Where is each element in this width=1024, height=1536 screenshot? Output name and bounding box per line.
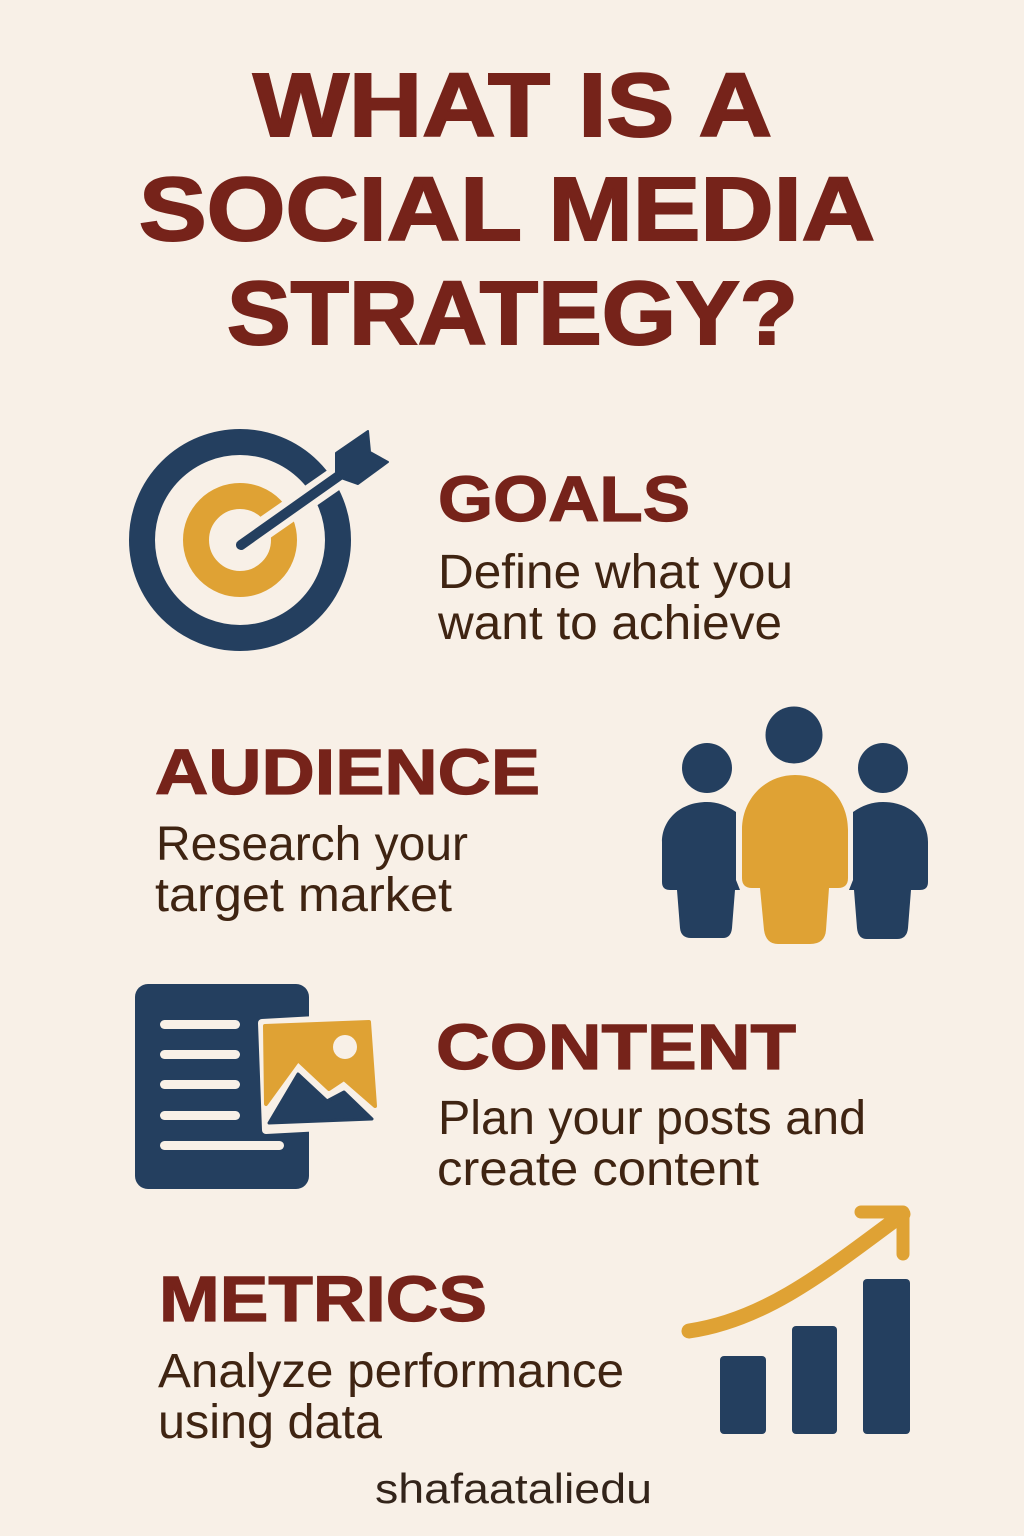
footer credit: shafaataliedu [375,1465,652,1512]
block: audience [155,736,540,922]
block: metrics [158,1263,624,1449]
block: goals [437,463,793,650]
icon: document with image [135,984,378,1189]
icon: target with arrow [142,431,388,638]
block: metrics: Analyze performance [158,1345,624,1398]
icon: growth chart [689,1212,910,1434]
title: SOCIAL MEDIA [139,160,875,260]
block: content: create content [437,1143,759,1196]
block: audience: AUDIENCE [155,736,540,808]
title [139,56,875,364]
block: goals: Define what you [438,546,793,599]
block: content [436,1011,866,1196]
block: metrics: using data [158,1396,382,1449]
block: audience: target market [155,869,452,922]
icon: people group [662,706,928,944]
block: audience: Research your [156,818,468,871]
title: WHAT IS A [253,56,772,156]
title: STRATEGY? [227,264,798,364]
block: content: CONTENT [436,1011,796,1083]
block: content: Plan your posts and [438,1092,866,1145]
block: goals: want to achieve [437,597,782,650]
block: metrics: METRICS [159,1263,487,1335]
block: goals: GOALS [438,463,690,535]
